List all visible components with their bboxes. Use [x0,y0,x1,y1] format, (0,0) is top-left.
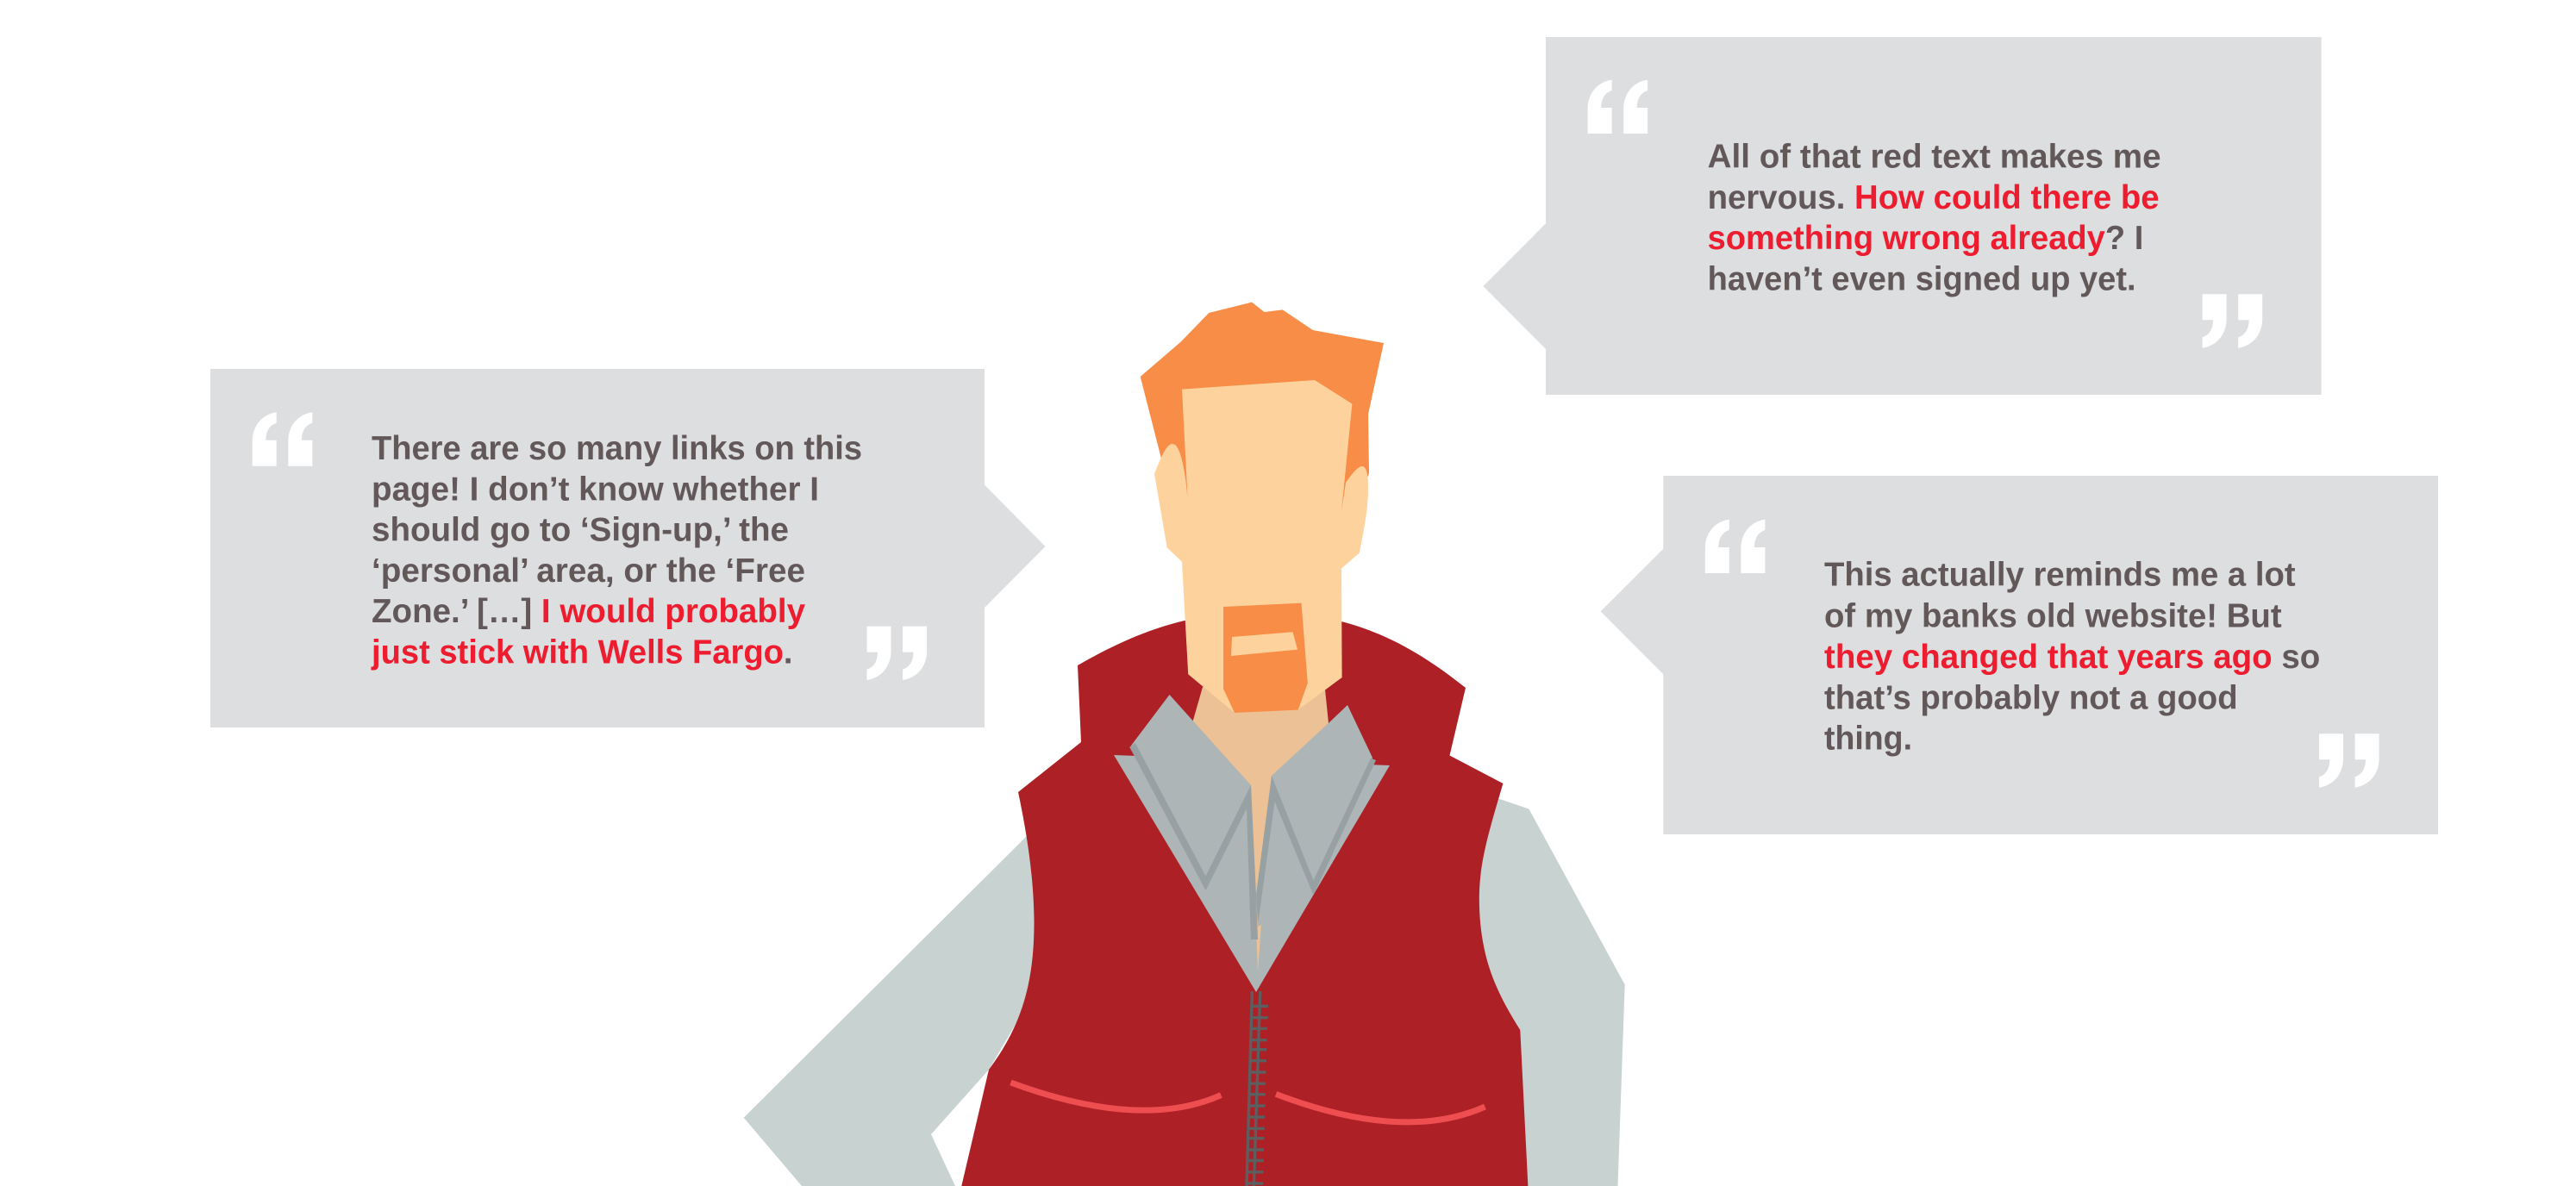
icon: opening quote mark [1588,80,1648,134]
left pocket [1010,1083,1221,1110]
collar stitching right [1256,758,1376,925]
bubble shape [1483,37,2322,395]
panel: top speech bubble [1483,37,2322,395]
zipper [1247,991,1268,1186]
panel: right speech bubble [1601,476,2438,834]
quote text: that’s probably not a good [1824,680,2238,717]
quote text: thing. [1824,721,1912,757]
face and ears [1154,380,1368,713]
panel: left speech bubble [210,369,1045,727]
bubble shape [1601,476,2438,834]
right collar flap [1258,705,1372,927]
bubble shape [210,369,1045,727]
quote text: This actually reminds me a lot [1824,557,2296,593]
quote text: should go to ‘Sign-up,’ the [372,512,789,549]
icon: closing quote mark [2319,733,2379,788]
red vest [961,621,1528,1186]
icon: opening quote mark [253,412,312,466]
quote text: they changed that years ago so [1824,639,2320,676]
icon: closing quote mark [2203,294,2262,348]
hair [1141,303,1384,517]
quote text [1708,138,2161,298]
quote text: ‘personal’ area, or the ‘Free [372,552,805,590]
icon: closing quote mark [867,627,927,680]
shirt collar base [1114,755,1390,992]
quote text: nervous. How could there be [1708,179,2160,216]
icon: opening quote mark [1705,520,1765,573]
quote text: Zone.’ […] I would probably [372,593,806,630]
figure: man in red vest [744,303,1625,1186]
left sleeve [744,835,1060,1186]
collar stitching left [1129,743,1258,939]
mouth [1231,632,1297,656]
goatee [1223,603,1308,713]
left collar flap [1131,695,1251,939]
right pocket [1276,1094,1485,1122]
quote text [1824,557,2320,757]
quote text: page! I don’t know whether I [372,471,819,508]
quote text: of my banks old website! But [1824,598,2282,635]
quote text: something wrong already? I [1708,220,2143,257]
neck [1192,687,1329,972]
quote text: just stick with Wells Fargo. [371,634,793,671]
quote text: There are so many links on this [372,430,862,467]
quote text: haven’t even signed up yet. [1708,261,2136,298]
quote text: All of that red text makes me [1708,138,2161,176]
right sleeve [1466,798,1625,1186]
quote text [371,430,862,671]
